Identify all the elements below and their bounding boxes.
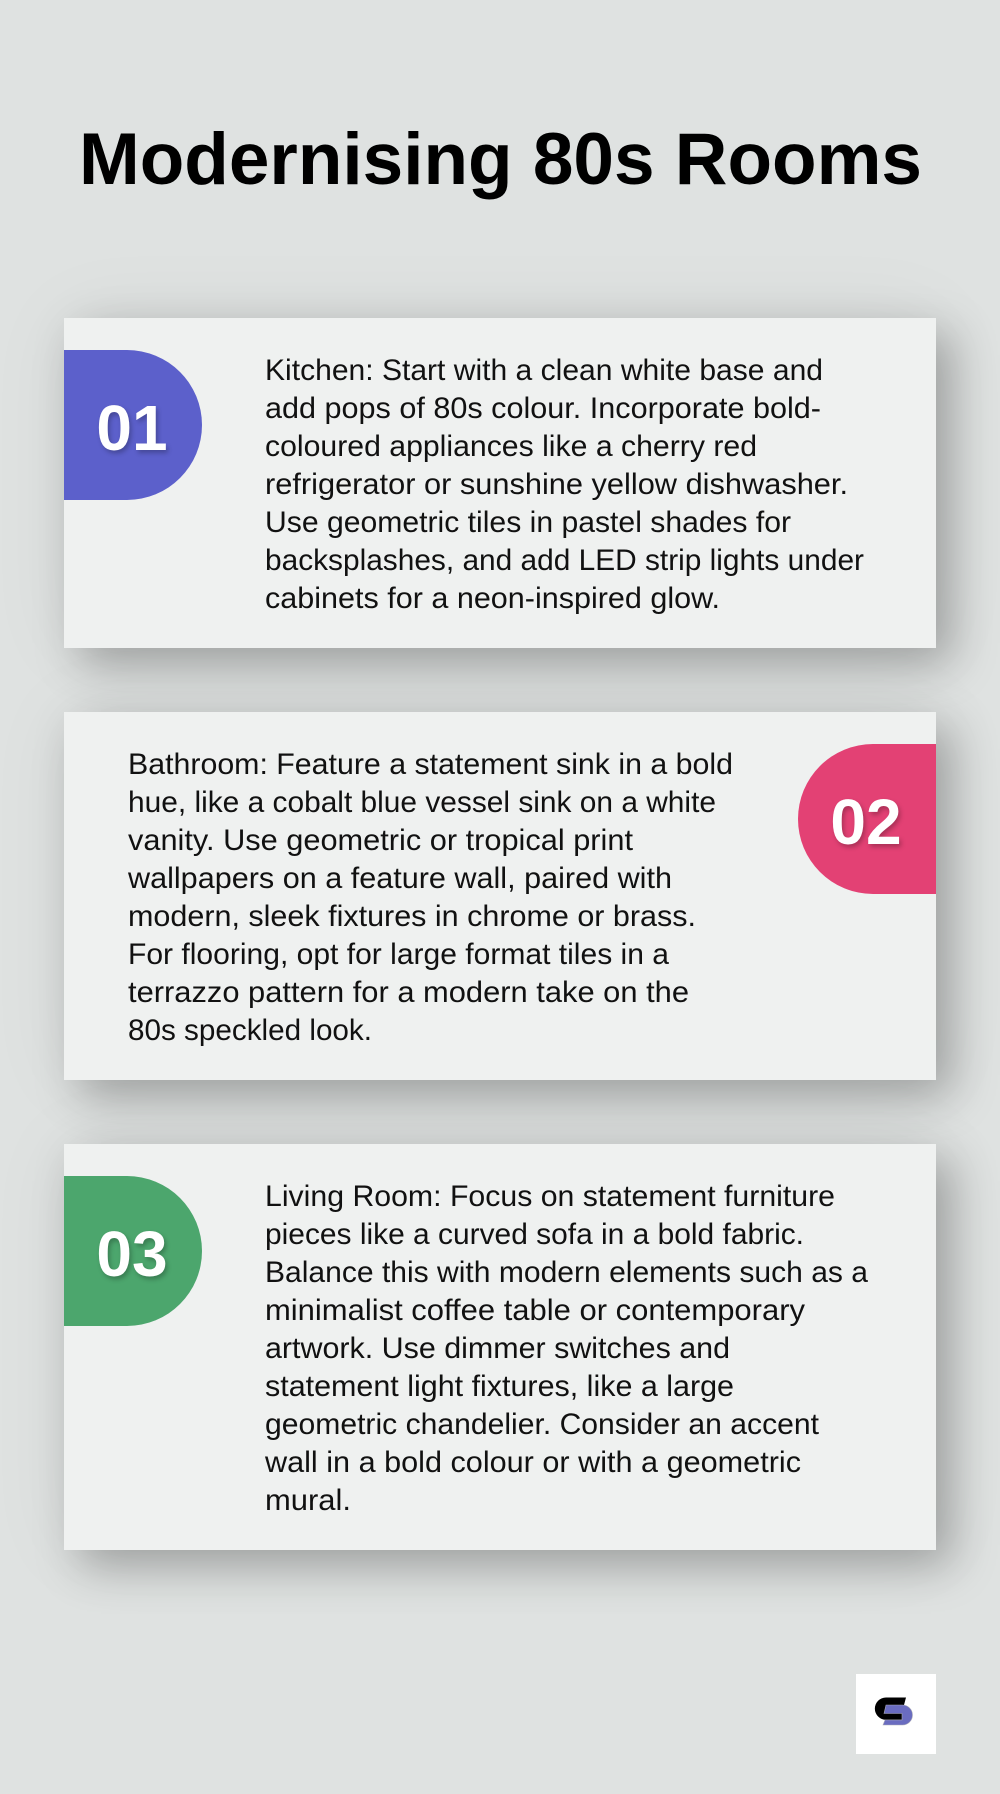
text: kitchen: Use geometric tiles in pastel shades for bbox=[265, 506, 791, 539]
text: living room: wall in a bold colour or with a geometric bbox=[264, 1446, 801, 1479]
text: bathroom: hue, like a cobalt blue vessel sink on a white bbox=[128, 786, 716, 819]
logo bbox=[856, 1674, 936, 1754]
text: kitchen: cabinets for a neon-inspired glow. bbox=[265, 582, 720, 615]
text: kitchen: backsplashes, and add LED strip lights under bbox=[265, 544, 864, 577]
text: bathroom: 80s speckled look. bbox=[128, 1014, 372, 1047]
text: bathroom: wallpapers on a feature wall, paired with bbox=[127, 862, 672, 895]
text: bathroom: modern, sleek fixtures in chrome or brass. bbox=[128, 900, 696, 933]
text: living room: mural. bbox=[265, 1484, 351, 1517]
text: bathroom: For flooring, opt for large format tiles in a bbox=[128, 938, 669, 971]
badge: 02 bbox=[798, 744, 936, 894]
text: bathroom: terrazzo pattern for a modern take on the bbox=[128, 976, 689, 1009]
text: kitchen: coloured appliances like a cherry red bbox=[265, 430, 757, 463]
text: living room: minimalist coffee table or contemporary bbox=[265, 1294, 805, 1327]
panel: bathroom bbox=[64, 712, 936, 1080]
title: Modernising 80s Rooms bbox=[79, 119, 922, 200]
badge: 02: 02 bbox=[830, 786, 902, 858]
text: living room: statement light fixtures, like a large bbox=[265, 1370, 734, 1403]
text: living room: geometric chandelier. Consider an accent bbox=[265, 1408, 820, 1441]
icon: logo black part bbox=[875, 1698, 906, 1720]
badge: 01 bbox=[64, 350, 202, 500]
badge: 03 bbox=[64, 1176, 202, 1326]
text: living room bbox=[264, 1180, 868, 1517]
text: bathroom: vanity. Use geometric or tropical print bbox=[128, 824, 634, 857]
text: living room: artwork. Use dimmer switches and bbox=[265, 1332, 730, 1365]
text: bathroom: Bathroom: Feature a statement sink in a bold bbox=[128, 748, 733, 781]
badge: 01: 01 bbox=[96, 392, 168, 464]
icon: logo blue part bbox=[883, 1705, 912, 1725]
panel: kitchen bbox=[64, 318, 936, 648]
text: living room: Balance this with modern elements such as a bbox=[265, 1256, 868, 1289]
text: kitchen: add pops of 80s colour. Incorporate bold- bbox=[265, 392, 821, 425]
text: kitchen bbox=[265, 354, 864, 615]
badge: 03: 03 bbox=[96, 1218, 168, 1290]
text: living room: pieces like a curved sofa in a bold fabric. bbox=[265, 1218, 804, 1251]
text: kitchen: Kitchen: Start with a clean white base and bbox=[265, 354, 823, 387]
panel: living room bbox=[64, 1144, 936, 1550]
text: living room: Living Room: Focus on statement furniture bbox=[265, 1180, 835, 1213]
text: kitchen: refrigerator or sunshine yellow dishwasher. bbox=[265, 468, 848, 501]
text: bathroom bbox=[127, 748, 733, 1047]
